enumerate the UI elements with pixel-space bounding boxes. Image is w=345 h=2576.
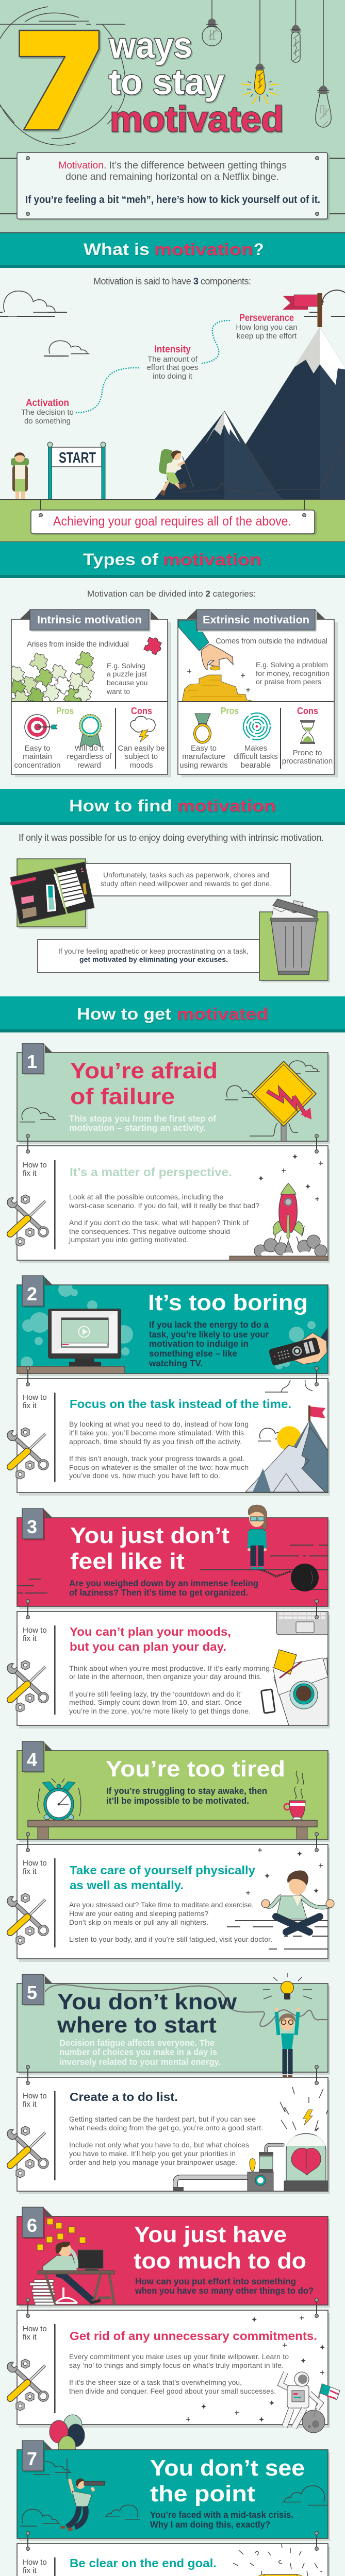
number tag: [22, 1741, 53, 1773]
number tag: [22, 2207, 53, 2239]
body text: Listen to your body, and if you’re still fatigued, visit your doctor.: [69, 1935, 272, 1943]
callout: activation: The decision to: [21, 408, 74, 417]
title: You don’t know: [57, 1989, 237, 2014]
icon: woman reaching up: [274, 2007, 300, 2076]
label: how to fix it: How to: [23, 1626, 47, 1635]
number tag: [22, 1043, 53, 1075]
text: example: E.g. Solving: [107, 662, 145, 670]
column text: pros and cons: concentration: [14, 761, 61, 770]
pros and cons labels: Cons: [297, 706, 318, 716]
text: arises: Arises from inside the individual: [27, 640, 129, 649]
clouds: [20, 1061, 320, 1136]
column text: pros and cons: Will do it: [75, 744, 104, 753]
column text: pros and cons: [14, 744, 165, 770]
subtitle: You’re faced with a mid-task crisis.: [150, 2510, 293, 2520]
subtitle: Why I am doing this, exactly?: [150, 2519, 270, 2530]
header: title area: [0, 0, 345, 232]
callout: activation: [21, 398, 74, 426]
body text: And if you don’t do the task, what will happen? Think of: [69, 1218, 249, 1227]
label: how to fix it: [23, 2325, 47, 2342]
callout: intensity: into doing it: [153, 372, 193, 381]
body text: Include not only what you have to do, but what choices: [69, 2141, 249, 2149]
number tag: 7: [27, 2448, 37, 2469]
label: how to fix it: How to: [23, 2092, 47, 2100]
subtitle: inversely related to your mental energy.: [59, 2057, 221, 2067]
body text: Focus on whatever is the smaller of the two: how much: [69, 1463, 249, 1471]
label: how to fix it: fix it: [23, 1634, 37, 1643]
number tag: [22, 1974, 53, 2006]
tag: intrinsic: Intrinsic motivation: [37, 614, 142, 626]
pros and cons labels: Pros: [221, 706, 239, 716]
icon: tools: [7, 2126, 47, 2178]
subtitle: [59, 2038, 221, 2067]
pros and cons labels: Cons: [131, 706, 152, 716]
dotted connectors: [76, 320, 229, 413]
card 1: afraid of failure: [17, 1043, 330, 1144]
callout: perseverance: [236, 313, 298, 341]
icon: idea bulb: [263, 1973, 312, 1999]
subtitle: This stops you from the first step of: [69, 1113, 216, 1124]
big number 7: [20, 30, 99, 130]
body text: [69, 1420, 249, 1480]
heading: [70, 1863, 255, 1892]
body text: [69, 1664, 270, 1715]
title: You just don’t: [70, 1523, 229, 1548]
fix 6: unnecessary commitments: [7, 2298, 340, 2459]
body text: Think about when you’re most productive. If it’s early morning: [69, 1664, 270, 1672]
heading: as well as mentally.: [70, 1878, 184, 1892]
panel: extrinsic motivation: [178, 609, 338, 777]
number tag: 1: [27, 1051, 37, 1072]
heading band: What is motivation?: ?: [254, 240, 264, 259]
icon: maze: [243, 713, 270, 740]
pros and cons labels: [56, 706, 152, 716]
subtitle: [69, 1578, 258, 1598]
illustration: meditating person: [227, 1848, 334, 1949]
body text: you’ve done vs. how much you have left to do.: [69, 1471, 220, 1480]
icon: tools: [7, 1893, 47, 1945]
panel: three components: [0, 276, 345, 500]
fix 5: to do list: [7, 2065, 330, 2194]
clouds: [20, 2462, 327, 2526]
text: example: because you: [107, 679, 147, 687]
heading band: What is motivation?: [0, 232, 345, 268]
callout: intensity: The amount of: [147, 355, 198, 364]
body text: Every commitment you make uses up your finite willpower. Learn to: [69, 2352, 289, 2361]
column text: pros and cons: manufacture: [182, 752, 225, 761]
body text: [69, 2352, 289, 2395]
sticky notes: [37, 2218, 86, 2250]
heading band: How to find motivation: [0, 789, 345, 825]
callout: intensity: [147, 344, 198, 381]
body text: If this isn’t enough, track your progress towards a goal.: [69, 1454, 244, 1463]
text: example: [256, 660, 330, 686]
icon: hand with remote: [268, 1328, 327, 1366]
label: how to fix it: fix it: [23, 2566, 37, 2575]
panel: willpower and rewards: [10, 859, 290, 929]
title: where to start: [57, 2012, 217, 2038]
tag: extrinsic: Extrinsic motivation: [203, 614, 309, 626]
flag: [283, 293, 322, 327]
icon: alarm clock: [38, 1778, 81, 1820]
label: how to fix it: How to: [23, 1393, 47, 1402]
number tag: [22, 1276, 53, 1308]
heading band: How to find motivation: motivation: [177, 796, 276, 815]
fix 1: perspective: [7, 1134, 330, 1263]
heading: Create a to do list.: [70, 2090, 178, 2104]
start sign: [47, 442, 106, 500]
label: how to fix it: [23, 1393, 47, 1410]
body text: or late in the afternoon, then organize your day around this.: [69, 1672, 262, 1681]
body text: you have to make. It’ll help you get your priorities in: [69, 2149, 236, 2158]
icon: target: [25, 715, 57, 739]
icon: person at desk: [30, 2242, 114, 2305]
icon: tools: [7, 1660, 47, 1712]
title: [70, 1523, 229, 1574]
title: [57, 1989, 237, 2038]
subtitle: Decision fatigue affects everyone. The: [59, 2038, 215, 2048]
icon: storm cloud: [130, 716, 155, 742]
illustration: trophy: [215, 2544, 328, 2576]
subtitle: [69, 1113, 216, 1133]
body text: [69, 1193, 259, 1244]
column text: pros and cons: [179, 744, 333, 770]
text: example: or praise from peers: [256, 677, 321, 686]
icon: woman with ball and chain: [248, 1505, 319, 1591]
number tag: 3: [27, 1516, 37, 1537]
illustration: desk with laptop: [261, 1612, 328, 1725]
icon: red puzzle piece: [144, 635, 164, 656]
fix 3: plan your day: [7, 1600, 330, 1728]
body text: Look at all the possible outcomes, including the: [69, 1193, 223, 1201]
column text: pros and cons: Can easily be: [118, 744, 165, 753]
body text: jumpstart you into getting motivated.: [69, 1235, 189, 1244]
body text: the consequences. This negative outcome should: [69, 1227, 230, 1235]
mountains: [154, 327, 345, 500]
icon: light bulbs: [202, 0, 331, 127]
panel: intro: Motivation. It’s the difference between getting things: [58, 160, 287, 171]
heading band: What is motivation?: What is: [84, 240, 150, 259]
illustration: brain in a jar: [173, 2087, 328, 2191]
body text: you’re in the zone, you’re more likely to get things done.: [69, 1707, 251, 1715]
title: [70, 1058, 218, 1109]
heading: Take care of yourself physically: [70, 1863, 255, 1877]
heading band: How to find motivation: How to find: [69, 796, 172, 815]
title: It’s too boring: [148, 1290, 308, 1315]
text: intro to components: Motivation is said to have 3 components:: [93, 276, 251, 286]
title words: [109, 25, 284, 139]
body text: Are you stressed out? Take time to meditate and exercise.: [69, 1901, 254, 1909]
icon: hand with coin: [178, 620, 233, 670]
text: example: E.g. Solving a problem: [256, 660, 328, 669]
column text: pros and cons: regardless of: [67, 752, 112, 761]
heading: Focus on the task instead of the time.: [70, 1397, 291, 1411]
panel: willpower and rewards: Unfortunately, tasks such as paperwork, chores and: [103, 871, 269, 879]
heading: It’s a matter of perspective.: [70, 1165, 232, 1179]
icon: trash can: [270, 899, 318, 975]
column text: pros and cons: subject to: [125, 752, 158, 761]
title: You just have: [134, 2222, 287, 2247]
table: [28, 1820, 317, 1839]
heading: [70, 1625, 231, 1653]
icon: man with telescope: [63, 2479, 105, 2531]
body text: [69, 1901, 272, 1943]
heading: You can’t plan your moods,: [70, 1625, 231, 1638]
bubbles: [21, 1282, 316, 1369]
column text: pros and cons: Makes: [244, 744, 267, 753]
heading band: How to get motivated: How to get: [77, 1005, 171, 1023]
number tag: 6: [27, 2215, 37, 2236]
heading band: How to get motivated: [0, 996, 345, 1032]
panel: eliminate excuses: get motivated by eliminating your excuses.: [79, 955, 228, 963]
card 7: see the point: [17, 2441, 330, 2541]
number tag: [22, 1509, 53, 1540]
panel: eliminate excuses: [38, 899, 330, 982]
title: You don’t see: [150, 2455, 305, 2481]
label: how to fix it: [23, 1859, 47, 1876]
title: [150, 2455, 305, 2506]
subtitle: [149, 1319, 269, 1368]
body text: then divide and conquer. Feel good about your small successes.: [69, 2387, 276, 2395]
ground and goal panel: Achieving your goal requires all of the above.: [53, 514, 291, 529]
body text: approach, time should fly as you finish off the activity.: [69, 1437, 242, 1446]
subtitle: motivation to indulge in: [149, 1338, 249, 1349]
column text: pros and cons: bearable: [241, 761, 271, 770]
callout: perseverance: keep up the effort: [237, 332, 297, 341]
column text: pros and cons: using rewards: [179, 761, 228, 770]
card 6: too much to do: [17, 2207, 330, 2308]
fix 4: take care: [7, 1833, 334, 1962]
body text: it’ll take you, you’ll become more stimulated. With this: [69, 1429, 244, 1437]
climbing hiker: [158, 449, 193, 494]
heading band: Types of motivation: motivation: [163, 550, 261, 569]
title: You’re afraid: [70, 1058, 218, 1083]
heading: Be clear on the end goal.: [70, 2556, 217, 2570]
ground and goal panel: [0, 499, 345, 542]
label: how to fix it: fix it: [23, 1169, 37, 1178]
subtitle: If you lack the energy to do a: [149, 1319, 269, 1330]
card 2: too boring: [17, 1276, 330, 1376]
label: how to fix it: fix it: [23, 1867, 37, 1876]
number tag: [22, 2441, 53, 2472]
number tag: 2: [27, 1283, 37, 1304]
subtitle: How can you put effort into something: [135, 2276, 296, 2286]
callout: perseverance: How long you can: [236, 323, 298, 332]
subtitle: [135, 2276, 314, 2296]
subtitle: motivation – starting an activity.: [69, 1123, 206, 1133]
card 3: don't feel like it: [17, 1505, 330, 1609]
icon: coin pile: [182, 669, 255, 702]
tag: intrinsic: [20, 609, 159, 632]
illustration: mountain with flag: [245, 1380, 328, 1492]
label: how to fix it: [23, 1161, 47, 1178]
label: how to fix it: [23, 2558, 47, 2575]
title words: ways: [109, 25, 192, 65]
subtitle: Are you weighed down by an immense feeling: [69, 1578, 258, 1588]
body text: If it’s the sheer size of a task that’s overwhelming you,: [69, 2378, 242, 2386]
column text: pros and cons: maintain: [23, 752, 52, 761]
label: how to fix it: fix it: [23, 1401, 37, 1410]
text: example: want to: [106, 687, 130, 696]
heading: Get rid of any unnecessary commitments.: [70, 2329, 317, 2343]
label: how to fix it: How to: [23, 1859, 47, 1868]
body text: what needs doing from the get go, you’re onto a good start.: [69, 2124, 263, 2132]
icon: tools: [7, 1428, 47, 1479]
body text: By looking at what you need to do, instead of how long: [69, 1420, 249, 1428]
heading band: Types of motivation: Types of: [83, 550, 158, 569]
fix 7: end goal: [7, 2532, 330, 2576]
panel: intrinsic motivation: [6, 609, 171, 777]
callout: perseverance: Perseverance: [239, 313, 294, 324]
icon: television: [17, 1309, 125, 1374]
body text: method. Simply count down from 10, and start. Once: [69, 1698, 242, 1706]
illustration: astronaut: [186, 2316, 340, 2433]
column text: pros and cons: moods: [129, 761, 153, 770]
wire: [44, 1985, 328, 2026]
callout: intensity: Intensity: [154, 344, 191, 355]
label: how to fix it: [23, 2092, 47, 2109]
number tag: 4: [27, 1749, 37, 1770]
body text: worst-case scenario. If you do fail, will it really be that bad?: [69, 1201, 259, 1210]
callout: activation: do something: [24, 417, 71, 426]
title: too much to do: [134, 2248, 306, 2274]
text: example: a puzzle just: [107, 670, 147, 678]
callout: intensity: effort that goes: [147, 363, 198, 372]
text: example: [106, 662, 147, 696]
label: how to fix it: [23, 1626, 47, 1643]
icon: coffee cup: [284, 1771, 305, 1820]
body text: If you’re still feeling lazy, try the ‘countdown and do it’: [69, 1690, 242, 1698]
body text: Don’t skip on meals or pull any all-nighters.: [69, 1918, 208, 1926]
callout: activation: Activation: [26, 398, 69, 409]
icon: warning sign: [251, 1061, 316, 1141]
number tag: 5: [27, 1982, 37, 2003]
subtitle: [150, 2510, 293, 2530]
text: comes from: Comes from outside the individual: [216, 637, 327, 646]
title words: motivated: [110, 99, 284, 139]
pros and cons labels: Pros: [56, 706, 74, 716]
body text: How are your eating and sleeping patterns?: [69, 1909, 208, 1918]
panel: eliminate excuses: If you’re feeling apathetic or keep procrastinating on a task,: [58, 947, 249, 955]
icon: hourglass: [300, 720, 315, 744]
icon: rosette: [79, 714, 101, 747]
heading band: Types of motivation: [0, 542, 345, 578]
text: if only: If only it was possible for us to enjoy doing everything with intrinsic motivation.: [19, 833, 324, 843]
card 4: too tired: [17, 1741, 330, 1842]
title: the point: [150, 2481, 255, 2506]
text: example: for money, recognition: [256, 669, 330, 677]
icon: green puzzle: [12, 651, 95, 701]
subtitle: If you’re struggling to stay awake, then: [106, 1786, 267, 1796]
heading band: How to get motivated: motivated: [177, 1005, 268, 1023]
card 5: where to start: [17, 1973, 330, 2076]
title words: to stay: [109, 62, 224, 102]
title: [134, 2222, 306, 2274]
subtitle: something else – like: [149, 1348, 237, 1359]
icon: planner: [10, 862, 94, 924]
standing hiker: [11, 452, 29, 500]
panel: intro: If you’re feeling a bit “meh”, here’s how to kick yourself out of it.: [25, 194, 320, 206]
heading: but you can plan your day.: [70, 1640, 226, 1653]
title: of failure: [70, 1084, 175, 1109]
title: You’re too tired: [106, 1756, 285, 1782]
body text: order and help you manage your brainpower usage.: [69, 2158, 237, 2166]
panel: intro: [0, 152, 345, 221]
column text: pros and cons: Easy to: [24, 744, 51, 753]
subtitle: when you have so many other things to do?: [135, 2285, 314, 2296]
clouds: [0, 290, 345, 483]
icon: balloons: [50, 2415, 85, 2459]
column text: pros and cons: Prone to: [293, 749, 322, 757]
tag: extrinsic: [186, 609, 325, 632]
label: how to fix it: How to: [23, 2325, 47, 2333]
column text: pros and cons: difficult tasks: [234, 752, 278, 761]
label: how to fix it: fix it: [23, 2333, 37, 2342]
body text: [69, 2115, 263, 2166]
label: how to fix it: fix it: [23, 2100, 37, 2109]
label: how to fix it: How to: [23, 2558, 47, 2567]
subtitle: [106, 1786, 267, 1806]
body text: say ‘no’ to things and simply focus on what’s truly important in life.: [69, 2361, 284, 2369]
subtitle: it’ll be impossible to be motivated.: [106, 1795, 249, 1806]
start sign: START: [59, 450, 96, 466]
fix 2: focus on the task: [7, 1367, 330, 1496]
icon: rocket: [229, 1154, 328, 1260]
subtitle: of laziness? Then it’s time to get organized.: [69, 1587, 248, 1598]
icon: medal: [195, 714, 210, 742]
subtitle: task, you’re likely to use your: [149, 1329, 269, 1340]
panel: intro: done and remaining horizontal on a Netflix binge.: [65, 171, 279, 182]
column text: pros and cons: reward: [77, 761, 101, 770]
body text: Getting started can be the hardest part, but if you can see: [69, 2115, 256, 2123]
heading band: What is motivation?: motivation: [154, 240, 253, 259]
pros and cons labels: [221, 706, 318, 716]
subtitle: watching TV.: [149, 1358, 203, 1368]
text: two categories: Motivation can be divided into 2 categories:: [87, 589, 256, 599]
column text: pros and cons: Easy to: [191, 744, 217, 753]
icon: tools: [7, 1195, 47, 1246]
title: feel like it: [70, 1549, 185, 1574]
icon: tools: [7, 2359, 47, 2411]
column text: pros and cons: procrastination: [282, 757, 333, 766]
label: how to fix it: How to: [23, 1161, 47, 1170]
panel: willpower and rewards: study often need willpower and rewards to get done.: [101, 879, 272, 888]
subtitle: number of choices you make in a day is: [59, 2047, 217, 2057]
